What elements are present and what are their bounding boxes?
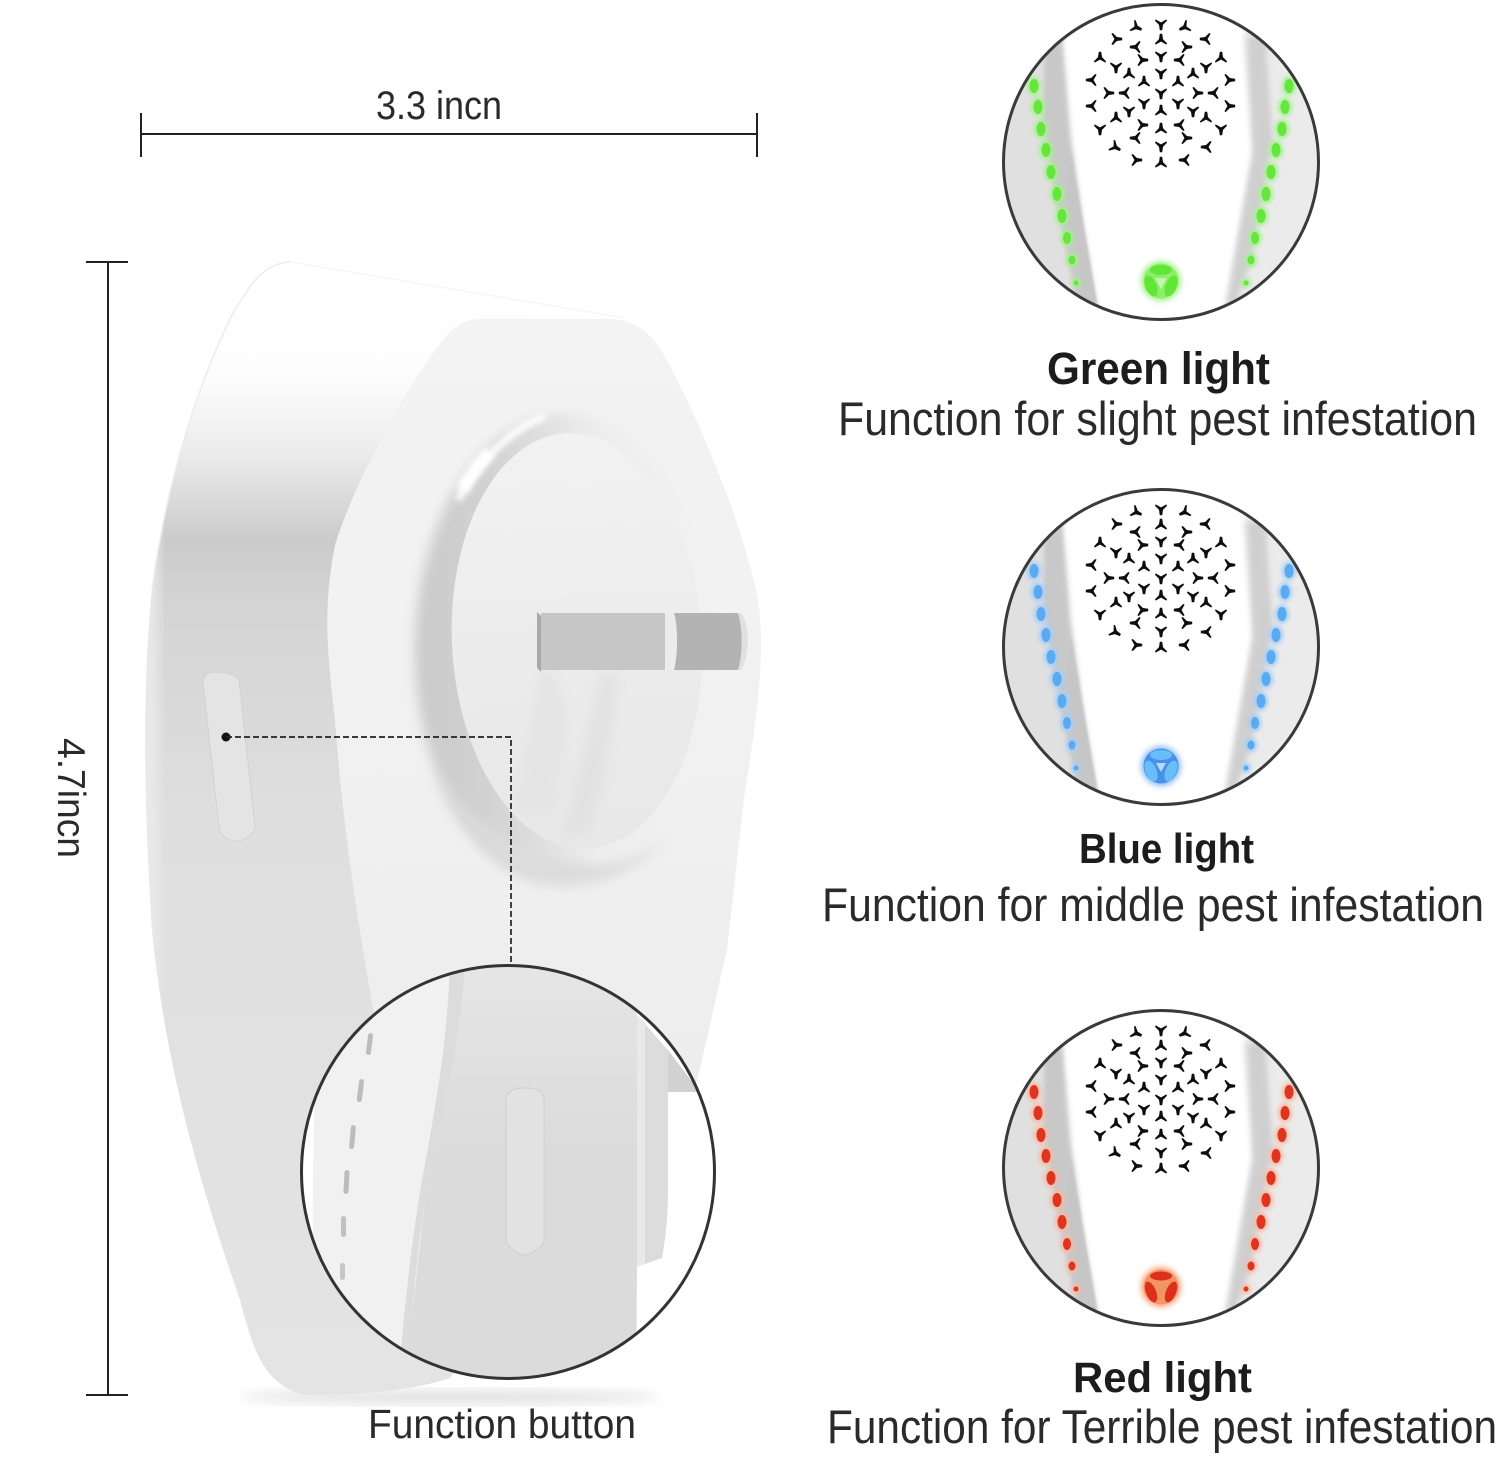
lens: blue light	[996, 489, 1326, 817]
label: function button: Function button	[368, 1401, 636, 1447]
caption: red light	[827, 1354, 1497, 1453]
caption: blue light	[822, 825, 1484, 931]
caption: red light: Red light	[1073, 1354, 1252, 1402]
seam band	[401, 972, 464, 1351]
caption: green light: Green light	[1047, 343, 1270, 394]
caption: green light	[838, 343, 1477, 445]
red LED rows	[1030, 1085, 1294, 1292]
front plate	[327, 319, 761, 1150]
front panel	[405, 960, 637, 1390]
white cut-out bottom right	[636, 1258, 662, 1332]
red centre indicator	[1141, 1267, 1181, 1307]
raised ring around plug base	[415, 413, 715, 887]
plug face disc	[441, 427, 713, 855]
function button on side	[203, 672, 255, 841]
width dimension: 3.3 inch: 3.3 incn	[376, 84, 502, 128]
caption: blue light: Blue light	[1079, 825, 1254, 872]
side plate	[644, 1024, 668, 1264]
callout line from button to zoom circle	[222, 732, 511, 966]
green centre indicator	[1141, 261, 1181, 301]
blue centre indicator	[1141, 746, 1181, 786]
plug pin	[515, 612, 748, 840]
enlarged function button	[506, 1088, 544, 1255]
blue LED rows	[1030, 564, 1294, 770]
device: white plug-in repeller	[138, 262, 761, 1403]
magnifier: function button close-up	[301, 960, 730, 1400]
height dimension: 4.7 inch: 4.7incn	[49, 738, 92, 858]
plug wedge	[668, 1050, 696, 1092]
lens: green light	[996, 4, 1326, 332]
green LED rows	[1030, 79, 1294, 286]
side wall with vents	[313, 976, 450, 1347]
lens: red light	[996, 1010, 1326, 1338]
